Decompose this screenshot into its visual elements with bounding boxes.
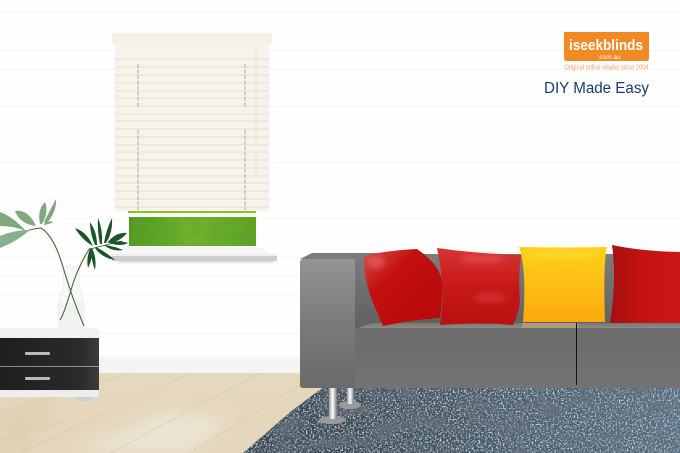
- baseboard: [0, 357, 680, 373]
- drawer handles: [25, 352, 50, 380]
- sideboard top: [0, 328, 99, 338]
- sideboard: [0, 328, 99, 401]
- left leaves: [0, 199, 56, 248]
- cushion: red 1: [364, 249, 442, 326]
- plant in vase: [0, 199, 128, 330]
- wall: [0, 0, 680, 357]
- window view: [127, 211, 258, 249]
- sofa back: [322, 253, 680, 330]
- logo: [564, 32, 649, 72]
- logo tagline: Original online retailer since 2004: [564, 64, 649, 72]
- subtitle: DIY Made Easy: [544, 80, 649, 97]
- logo badge: .com.au: [597, 54, 621, 61]
- rug: [243, 388, 680, 453]
- stems: [0, 228, 90, 326]
- blind slats: [115, 44, 269, 211]
- blind headrail: [112, 33, 272, 44]
- window blind: [112, 33, 277, 263]
- seat front: [355, 328, 680, 388]
- seat top: [355, 323, 680, 330]
- seat divider: [576, 323, 577, 385]
- sofa legs: [319, 386, 361, 424]
- upper drawer: [0, 338, 99, 366]
- logo badge: [564, 32, 649, 61]
- logo badge: iseekblinds: [569, 37, 643, 54]
- lower drawer: [0, 366, 99, 390]
- sideboard foot: [74, 397, 93, 401]
- sofa arm: [300, 253, 355, 388]
- floor: [0, 373, 680, 453]
- cushion: yellow: [519, 247, 607, 322]
- cushion: red 2: [437, 248, 521, 325]
- sideboard base: [0, 390, 99, 397]
- right leaves: [75, 218, 128, 270]
- vase: [58, 266, 84, 330]
- cushion: red 3: [610, 245, 680, 323]
- window sill: [112, 247, 277, 263]
- sofa: [300, 245, 680, 424]
